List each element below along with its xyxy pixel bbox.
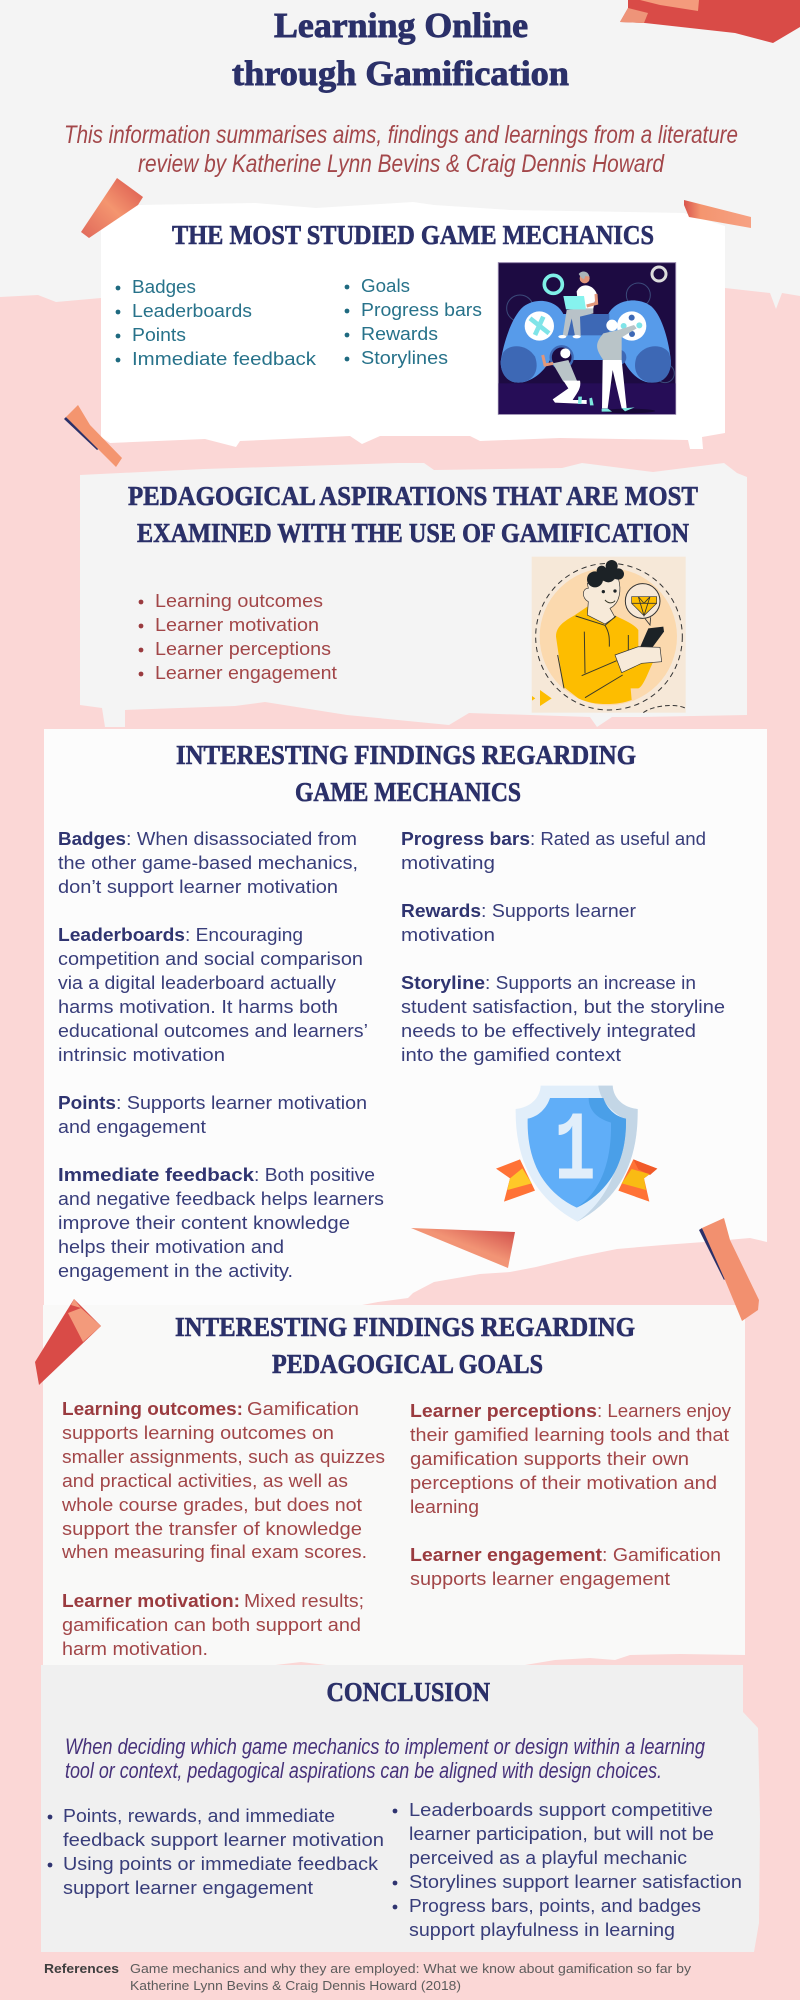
text: leaderboards finding: competition and social comparison — [58, 949, 363, 969]
text: learning outcomes finding — [61, 1399, 385, 1562]
list: mechanics column two: Progress bars — [361, 300, 482, 320]
references — [44, 1961, 692, 1993]
text: learner motivation finding: Learner motivation: — [62, 1591, 240, 1611]
text: learner perceptions finding: Learner perceptions — [410, 1401, 597, 1421]
title: Learning Online — [274, 6, 528, 45]
list: pedagogical aspirations: Learning outcomes — [155, 591, 323, 611]
panel: most studied game mechanics — [101, 202, 725, 449]
text: storyline finding: student satisfaction, but the storyline — [401, 997, 725, 1017]
text: learner engagement finding: : Gamification — [602, 1545, 721, 1565]
text: storyline finding: Storyline — [401, 973, 485, 993]
text: badges finding: : When disassociated from — [126, 829, 357, 849]
tape: right of findings panel — [699, 1218, 759, 1321]
panel: findings regarding pedagogical goals — [43, 1305, 745, 1666]
text: learner engagement finding: Learner engagement — [410, 1545, 602, 1565]
tape: panel one bottom left — [64, 405, 122, 467]
text: immediate feedback finding: engagement in the activity. — [58, 1261, 293, 1281]
title: through Gamification — [232, 54, 569, 93]
text: leaderboards finding: harms motivation. It harms both — [58, 997, 338, 1017]
list: pedagogical aspirations: Learner motivation — [155, 615, 319, 635]
text: learner perceptions finding: perceptions of their motivation and — [410, 1473, 717, 1493]
heading: findings regarding pedagogical goals: PEDAGOGICAL GOALS — [272, 1349, 543, 1379]
list: pedagogical aspirations — [139, 591, 337, 683]
list: mechanics column one: Immediate feedback — [132, 349, 317, 369]
text: learning outcomes finding: support the transfer of knowledge — [62, 1519, 362, 1539]
list: mechanics column two — [345, 276, 482, 368]
text: learner perceptions finding: : Learners enjoy — [597, 1401, 731, 1421]
list: conclusion column two: Storylines support learner satisfaction — [409, 1872, 742, 1892]
text: learner perceptions finding: learning — [410, 1497, 479, 1517]
list: mechanics column one: Badges — [132, 277, 196, 297]
list: conclusion column two: support playfulness in learning — [409, 1920, 675, 1940]
title — [232, 6, 569, 93]
text: learner engagement finding — [410, 1545, 721, 1589]
text: points finding — [58, 1093, 367, 1137]
text: learning outcomes finding: smaller assignments, such as quizzes — [62, 1447, 385, 1467]
heading: pedagogical aspirations: PEDAGOGICAL ASPIRATIONS THAT ARE MOST — [128, 481, 698, 511]
panel: findings regarding game mechanics — [44, 729, 767, 1306]
text: badges finding — [58, 829, 358, 897]
list: conclusion column two: Leaderboards support competitive — [409, 1800, 713, 1820]
heading: findings regarding game mechanics: GAME MECHANICS — [295, 777, 521, 807]
list: mechanics column one: Leaderboards — [132, 301, 252, 321]
text: badges finding: Badges — [58, 829, 126, 849]
text: learner engagement finding: supports learner engagement — [410, 1569, 670, 1589]
references: Katherine Lynn Bevins & Craig Dennis Howard (2018) — [130, 1978, 461, 1993]
text: leaderboards finding: Leaderboards — [58, 925, 185, 945]
heading: findings regarding pedagogical goals — [175, 1312, 635, 1379]
text: rewards finding: : Supports learner — [481, 901, 636, 921]
text: learner perceptions finding: their gamified learning tools and that — [410, 1425, 729, 1445]
list: conclusion column one: support learner engagement — [63, 1878, 313, 1898]
references: References — [44, 1961, 119, 1976]
tape: triangle above findings panel edge — [411, 1228, 515, 1268]
text: learner motivation finding: harm motivation. — [62, 1639, 208, 1659]
text: leaderboards finding: educational outcomes and learners’ — [58, 1021, 368, 1041]
icon: number one shield badge — [496, 1086, 657, 1222]
text: badges finding: don’t support learner motivation — [58, 877, 338, 897]
text: leaderboards finding: via a digital leaderboard actually — [58, 973, 336, 993]
text: storyline finding: needs to be effectively integrated — [401, 1021, 696, 1041]
text: points finding: and engagement — [58, 1117, 206, 1137]
list: mechanics column two: Storylines — [361, 348, 448, 368]
text: rewards finding — [401, 901, 636, 945]
text: progress bars finding — [401, 829, 706, 873]
text: immediate feedback finding — [58, 1165, 384, 1281]
text: learner perceptions finding — [410, 1401, 731, 1517]
list: mechanics column two: Goals — [361, 276, 410, 296]
text: learning outcomes finding: and practical activities, as well as — [62, 1471, 348, 1491]
text: progress bars finding: motivating — [401, 853, 495, 873]
subtitle: review by Katherine Lynn Bevins & Craig Dennis Howard — [138, 150, 665, 178]
text: points finding: Points — [58, 1093, 116, 1113]
icon: person with phone illustration — [532, 557, 686, 713]
text: immediate feedback finding: and negative feedback helps learners — [58, 1189, 384, 1209]
text: immediate feedback finding: improve their content knowledge — [58, 1213, 350, 1233]
list: conclusion column two — [393, 1800, 742, 1940]
icon: number one shield badge: 1 — [554, 1096, 596, 1208]
text: progress bars finding: : Rated as useful and — [530, 829, 706, 849]
list: conclusion column two: Progress bars, points, and badges — [409, 1896, 701, 1916]
heading: pedagogical aspirations: EXAMINED WITH THE USE OF GAMIFICATION — [137, 518, 689, 548]
list: conclusion column two: learner participation, but will not be — [409, 1824, 714, 1844]
list: conclusion column one: Using points or immediate feedback — [63, 1854, 379, 1874]
text: storyline finding — [401, 973, 725, 1065]
list: conclusion column one: feedback support learner motivation — [63, 1830, 384, 1850]
list: mechanics column two: Rewards — [361, 324, 438, 344]
text: immediate feedback finding: helps their motivation and — [58, 1237, 284, 1257]
text: learning outcomes finding: Gamification — [247, 1399, 359, 1419]
list: conclusion column two: perceived as a playful mechanic — [409, 1848, 687, 1868]
text: learner motivation finding — [62, 1591, 364, 1659]
text: immediate feedback finding: Immediate feedback — [58, 1165, 255, 1185]
panel: pedagogical aspirations — [80, 463, 747, 727]
text: learning outcomes finding: whole course grades, but does not — [61, 1495, 362, 1515]
text: storyline finding: : Supports an increase in — [485, 973, 696, 993]
text: immediate feedback finding: : Both positive — [254, 1165, 375, 1185]
text: rewards finding: Rewards — [401, 901, 481, 921]
list: conclusion column one — [48, 1806, 384, 1898]
text: points finding: : Supports learner motivation — [116, 1093, 367, 1113]
text: learner motivation finding: Mixed results; — [244, 1591, 364, 1611]
text: learning outcomes finding: when measuring final exam scores. — [61, 1542, 367, 1562]
references: Game mechanics and why they are employed: What we know about gamification so far by — [130, 1961, 692, 1976]
list: mechanics column one — [116, 277, 317, 369]
tape: left of pedagogical goals panel — [35, 1299, 101, 1385]
text: rewards finding: motivation — [401, 925, 495, 945]
text: learning outcomes finding: Learning outcomes: — [62, 1399, 243, 1419]
list: pedagogical aspirations: Learner perceptions — [155, 639, 331, 659]
list: mechanics column one: Points — [132, 325, 186, 345]
text: conclusion statement — [65, 1734, 706, 1783]
text: learner perceptions finding: gamification supports their own — [410, 1449, 689, 1469]
tape: top right red — [620, 0, 800, 43]
text: learning outcomes finding: supports learning outcomes on — [62, 1423, 334, 1443]
heading: pedagogical aspirations — [128, 481, 698, 548]
icon: game controller illustration — [498, 263, 676, 414]
heading: conclusion: CONCLUSION — [326, 1677, 490, 1707]
text: learner motivation finding: gamification can both support and — [62, 1615, 361, 1635]
subtitle — [64, 121, 738, 178]
tape: panel one top left — [81, 178, 143, 238]
heading: most studied game mechanics: THE MOST STUDIED GAME MECHANICS — [172, 220, 654, 250]
heading: findings regarding pedagogical goals: INTERESTING FINDINGS REGARDING — [175, 1312, 635, 1342]
heading: findings regarding game mechanics — [176, 740, 636, 807]
text: progress bars finding: Progress bars — [401, 829, 530, 849]
list: pedagogical aspirations: Learner engagement — [155, 663, 337, 683]
text: storyline finding: into the gamified context — [401, 1045, 621, 1065]
text: leaderboards finding: intrinsic motivation — [58, 1045, 225, 1065]
text: badges finding: the other game-based mechanics, — [58, 853, 358, 873]
text: conclusion statement: tool or context, pedagogical aspirations can be aligned with design choices. — [65, 1758, 662, 1783]
heading: findings regarding game mechanics: INTERESTING FINDINGS REGARDING — [176, 740, 636, 770]
tape: panel one top right — [684, 200, 751, 228]
text: leaderboards finding: : Encouraging — [185, 925, 303, 945]
panel: conclusion — [41, 1665, 760, 1952]
list: conclusion column one: Points, rewards, and immediate — [63, 1806, 335, 1826]
text: leaderboards finding — [58, 925, 368, 1065]
